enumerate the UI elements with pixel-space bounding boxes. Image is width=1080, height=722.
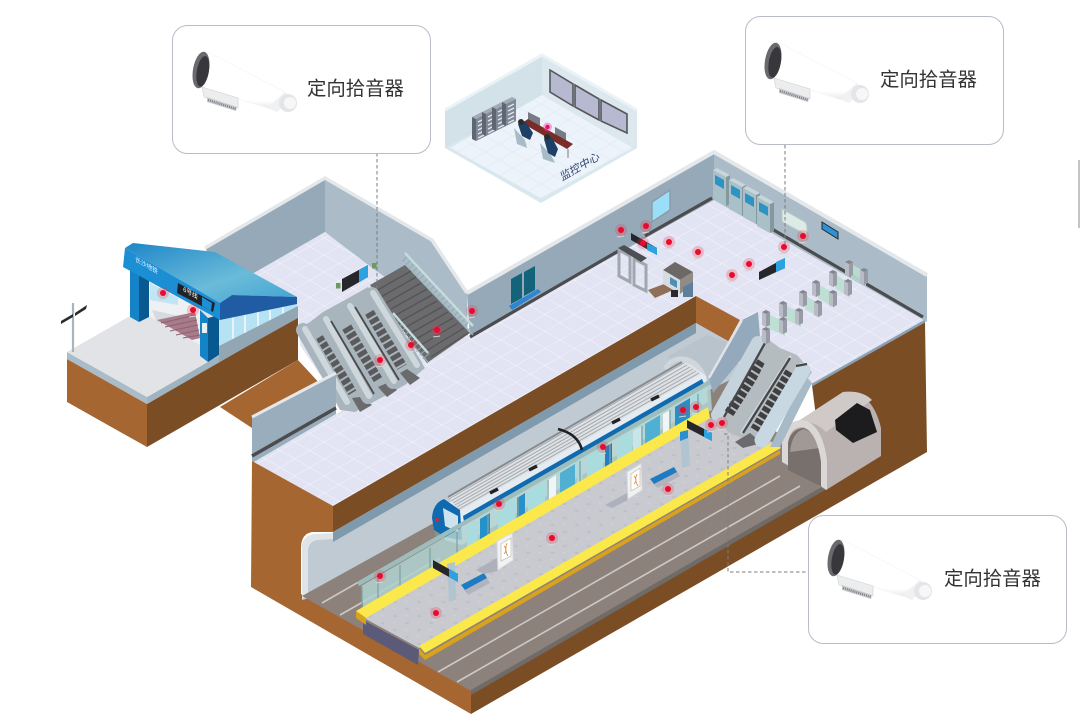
conveyor	[648, 280, 680, 298]
roof top	[125, 243, 297, 303]
leader line left	[376, 153, 378, 290]
right edge mark	[1078, 160, 1080, 228]
train hall back wall	[302, 323, 745, 600]
poster stands	[627, 464, 642, 499]
left pillar	[130, 262, 139, 322]
concourse edge strip	[812, 321, 925, 385]
staircase	[370, 253, 473, 363]
shadows	[605, 493, 628, 508]
street sign pole	[61, 303, 87, 352]
near yellow edge	[419, 450, 780, 660]
leader line top right	[784, 145, 786, 246]
far yellow edge	[356, 407, 710, 618]
track bed	[302, 380, 825, 695]
station box brown	[251, 296, 927, 714]
joint	[558, 429, 582, 450]
door panels	[467, 520, 478, 549]
right band	[762, 370, 803, 440]
tunnel opening	[835, 403, 877, 443]
escalator steps	[318, 338, 352, 393]
hanging sign upper room	[336, 263, 376, 292]
wall skirting	[470, 198, 923, 337]
video wall	[550, 70, 627, 133]
callout: top right microphone	[746, 16, 1004, 144]
bench shadows	[464, 471, 680, 595]
x-ray machine	[663, 262, 693, 280]
callout: left microphone	[172, 26, 430, 154]
icon: microphone camera	[825, 538, 932, 600]
metro station entrance building	[123, 243, 298, 362]
steps A	[728, 362, 762, 415]
monitoring centre room	[445, 55, 637, 203]
balustrade 3	[349, 307, 393, 382]
ticket gates	[762, 260, 868, 344]
tunnel top	[797, 392, 872, 432]
right wall	[542, 55, 637, 148]
body	[445, 364, 708, 545]
landing plates	[352, 397, 372, 412]
tunnel arch far end	[663, 335, 727, 385]
blue-grey wall	[709, 312, 760, 393]
middle band	[738, 360, 772, 427]
rails	[438, 476, 800, 682]
platform screen doors	[358, 382, 712, 614]
short front wall	[252, 373, 336, 463]
platform sign left	[433, 560, 458, 582]
left band	[718, 343, 758, 415]
line 6 sign	[177, 283, 215, 312]
pink stairway	[157, 312, 200, 340]
entrance recess	[149, 278, 200, 345]
leader line bottom right	[724, 434, 808, 572]
icon: microphone camera	[190, 50, 297, 112]
monitor dot	[543, 122, 552, 132]
top rail	[358, 382, 710, 584]
pillar right	[680, 430, 690, 468]
stair railing far	[405, 258, 473, 330]
right escalator group	[709, 312, 812, 448]
gate pedestals	[762, 310, 770, 327]
roof fascia	[123, 248, 220, 320]
operators	[518, 121, 533, 140]
stripe	[463, 379, 704, 522]
callout label: 定向拾音器	[944, 568, 1041, 590]
entrance ground block	[67, 268, 335, 447]
door frames	[619, 250, 630, 282]
desk	[522, 119, 573, 149]
side panel	[770, 375, 812, 447]
escalator backing	[297, 287, 425, 412]
right pillar	[200, 310, 208, 362]
backing	[715, 335, 812, 447]
steps B	[755, 372, 790, 430]
desk	[671, 290, 678, 297]
hanging signs concourse	[631, 233, 785, 280]
posts	[362, 394, 698, 612]
security check	[618, 245, 693, 298]
landing plate	[735, 433, 762, 448]
balustrade 2	[325, 320, 368, 397]
roof equipment	[490, 396, 659, 493]
chairs	[514, 128, 555, 163]
platform sign right	[687, 420, 712, 441]
left wall	[445, 55, 542, 148]
ticket kiosks	[713, 168, 730, 206]
floor	[445, 95, 637, 203]
station name: 长沙地铁	[135, 254, 159, 276]
platform furniture	[433, 420, 712, 602]
icon: microphone camera	[762, 41, 869, 103]
pillar left	[447, 562, 456, 602]
concourse long wall	[467, 152, 927, 338]
server racks	[472, 112, 486, 141]
information panel	[202, 323, 207, 333]
callout label: 定向拾音器	[307, 78, 404, 100]
route map board	[782, 209, 807, 235]
concourse floor	[252, 200, 925, 506]
benches	[650, 467, 677, 484]
wall sign	[822, 222, 838, 239]
callout: bottom right microphone	[808, 516, 1066, 644]
platform surface	[356, 407, 781, 665]
gate glass	[768, 264, 866, 336]
glass side	[219, 302, 297, 346]
monitors	[528, 112, 566, 143]
right tunnel portal	[782, 392, 881, 490]
wall furniture	[509, 168, 838, 310]
roof underside	[220, 295, 297, 320]
handrail lines	[724, 343, 807, 433]
roof	[448, 362, 701, 511]
cab	[432, 499, 462, 540]
left escalators	[297, 287, 425, 412]
directional microphone markers	[157, 220, 809, 620]
room label: 监控中心	[559, 149, 601, 184]
train	[432, 362, 708, 545]
metro station entrance building: 6号线	[183, 284, 199, 302]
back room walls and floor	[205, 178, 470, 412]
service windows	[511, 266, 535, 304]
platform end face	[363, 620, 419, 665]
wall window	[652, 190, 670, 222]
balustrade 1	[303, 330, 345, 403]
stair railing near	[393, 318, 428, 358]
brown slope behind entrance	[220, 360, 335, 428]
callout label: 定向拾音器	[880, 69, 977, 91]
balustrade 4	[372, 294, 416, 366]
